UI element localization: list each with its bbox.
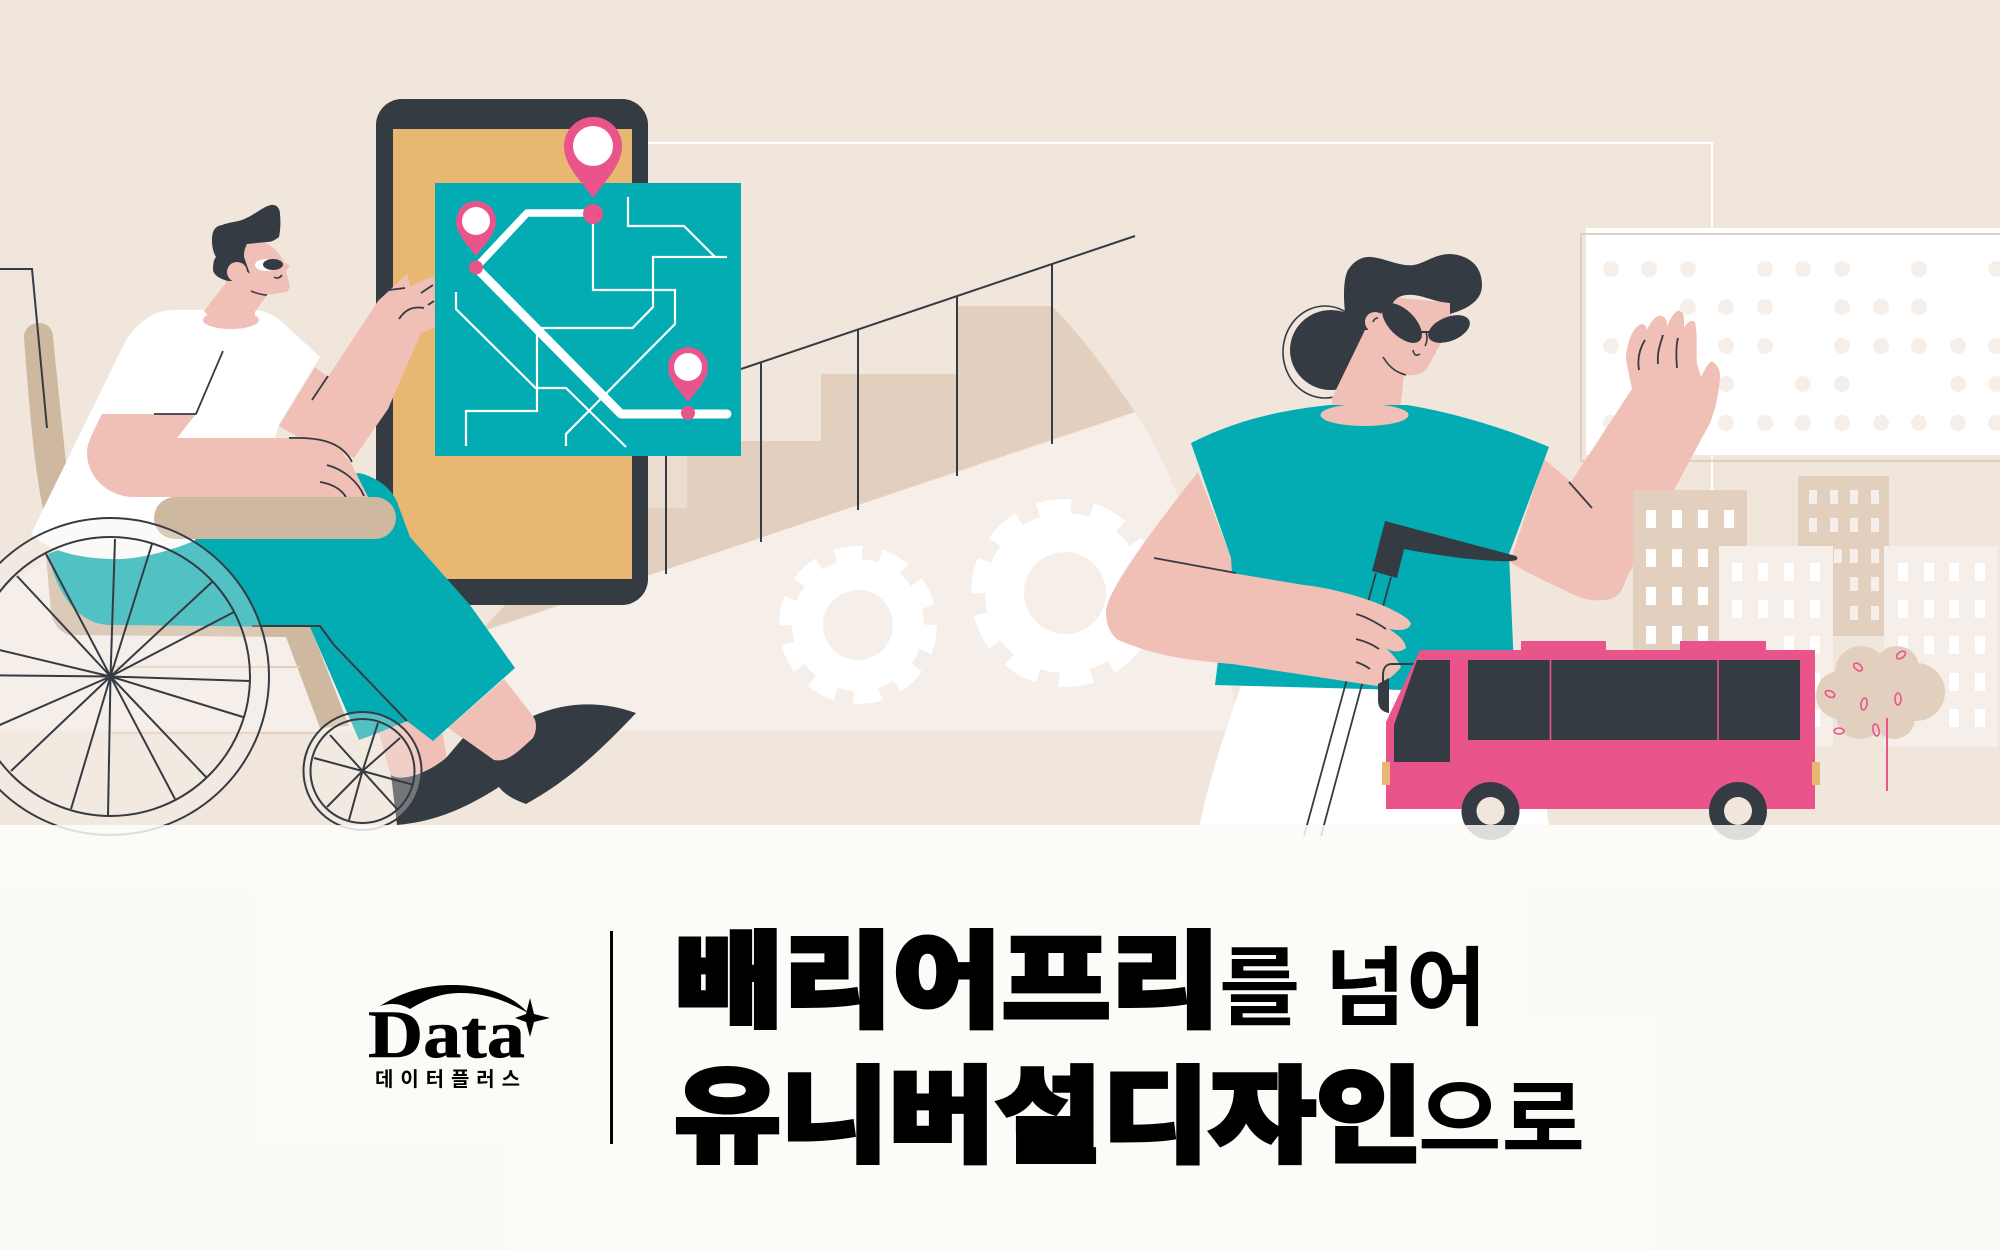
pin: large [564, 117, 622, 198]
map stop dots [469, 204, 695, 420]
woman with cane [1106, 254, 1720, 836]
background: stair railing [666, 236, 1135, 574]
arm lines [1154, 335, 1678, 669]
bus wheels [1462, 782, 1767, 840]
white trousers [1198, 686, 1550, 834]
shirt and arm lines [154, 285, 434, 497]
neck and face [203, 240, 290, 329]
logo swoosh [380, 985, 528, 1013]
pin: right [668, 347, 708, 402]
face lines [251, 275, 282, 295]
hair [1344, 254, 1482, 330]
pin: left [456, 201, 496, 256]
title line 1 suffix: 를 넘어 [1219, 941, 1487, 1037]
teal shirt [1191, 405, 1549, 690]
bus windows [1394, 660, 1800, 762]
title line 2 suffix: 으로 [1418, 1073, 1585, 1169]
background: stairs and ramp [0, 306, 1240, 731]
person in wheelchair [0, 205, 636, 825]
illustration background [0, 0, 2000, 825]
logo star [515, 998, 550, 1037]
wheelchair frame [24, 323, 349, 733]
tree [1816, 646, 1945, 791]
logo word: Data [368, 996, 525, 1072]
armrest [154, 497, 396, 539]
bus [1378, 641, 1820, 840]
white shirt [31, 310, 320, 559]
logo: Data Plus [368, 985, 550, 1091]
logo caption: 데이터플러스 [375, 1068, 520, 1091]
raised arm [1510, 311, 1720, 600]
bus lights [1382, 762, 1820, 785]
hair [212, 205, 280, 281]
ear [227, 262, 247, 282]
bus body [1386, 641, 1815, 809]
raised arm [279, 274, 435, 458]
neck and face [1332, 297, 1452, 410]
map main routes [476, 213, 727, 414]
leg skin [378, 679, 536, 790]
bus mirror [1378, 664, 1416, 713]
lowered arm [1106, 472, 1411, 686]
sunglasses [1375, 296, 1474, 350]
eye [255, 259, 283, 271]
lower panel [0, 825, 2000, 1250]
ear [1365, 312, 1385, 332]
dotted white panel [1581, 228, 2000, 461]
buildings [1633, 476, 1998, 747]
wheelchair small wheel [304, 712, 422, 830]
shoes [391, 704, 636, 825]
divider [610, 931, 613, 1144]
face lines [1373, 318, 1427, 375]
forearm [87, 414, 368, 497]
icon: small gear [786, 553, 930, 697]
map thin routes [456, 197, 727, 447]
background: frame line [640, 143, 1712, 490]
cane shaft [1304, 573, 1391, 836]
hair bun [1283, 306, 1372, 398]
trousers [48, 473, 515, 741]
left wall line [0, 269, 47, 428]
phone [376, 99, 648, 605]
cane handle [1372, 521, 1517, 578]
title [674, 925, 1585, 1176]
wheelchair large wheel [0, 518, 269, 835]
title line 2: 유니버설디자인 [674, 1060, 1423, 1176]
map panel [435, 117, 741, 456]
icon: large gear [979, 507, 1151, 679]
title line 1: 배리어프리 [674, 925, 1220, 1041]
